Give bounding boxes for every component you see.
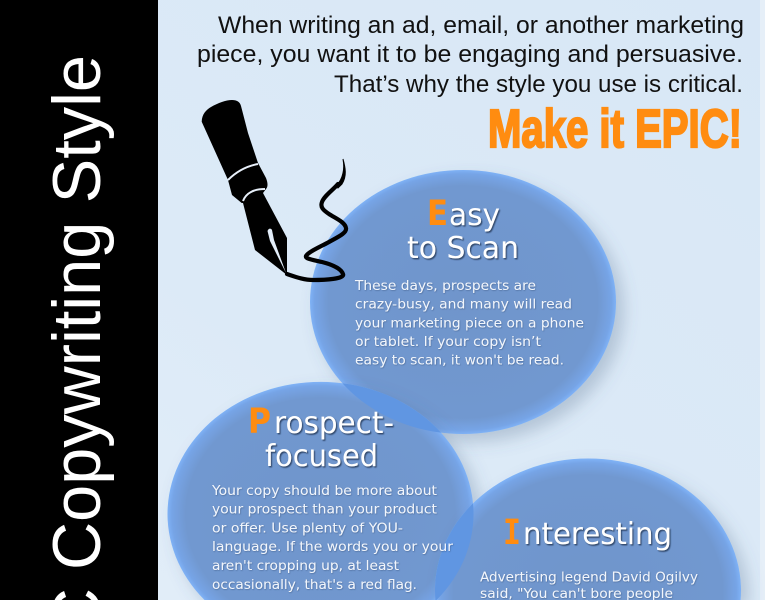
heading: Interesting: I: [503, 513, 521, 553]
text block: Easy to Scan body: [354, 279, 584, 369]
heading: Prospect-focused: [248, 402, 394, 474]
text block: Prospect-focused body: Your copy should be more about: [211, 484, 437, 499]
text block: Prospect-focused body: occasionally, that's a red flag.: [212, 578, 417, 593]
heading: Prospect-focused: P: [248, 402, 271, 442]
text block: Prospect-focused body: [211, 484, 454, 593]
panel: Easy to Scan bubble: [310, 170, 616, 434]
heading: Easy to Scan: E: [427, 194, 448, 234]
panel: Prospect-focused bubble: [168, 382, 474, 600]
intro text: That’s why the style you use is critical.: [334, 71, 743, 98]
text block: Easy to Scan body: easy to scan, it won't be read.: [355, 354, 564, 369]
icon: fountain pen with ink squiggle: [202, 100, 346, 280]
heading: Easy to Scan: to Scan: [407, 231, 519, 266]
intro text: piece, you want it to be engaging and persuasive.: [197, 41, 743, 68]
text block: Easy to Scan body: These days, prospects are: [354, 279, 536, 294]
sidebar heading: Copywriting Style: [39, 55, 115, 570]
text block: Easy to Scan body: or tablet. If your copy isn’t: [355, 335, 541, 350]
heading: Easy to Scan: [407, 194, 519, 266]
overlap lens: Easy and Prospect bubbles: [342, 383, 441, 432]
intro text: When writing an ad, email, or another marketing: [218, 12, 744, 39]
intro text: [197, 12, 744, 98]
text block: Prospect-focused body: language. If the words you or your: [212, 540, 454, 555]
panel: black sidebar with vertical title: [0, 0, 158, 600]
text block: Prospect-focused body: your prospect than your product: [212, 503, 437, 518]
panel: Interesting bubble: [435, 458, 741, 600]
text block: Interesting body: [480, 570, 698, 600]
heading: Easy to Scan: asy: [449, 198, 500, 233]
heading: Prospect-focused: rospect-: [274, 406, 394, 441]
text block: Easy to Scan body: your marketing piece on a phone: [355, 316, 584, 331]
text block: Interesting body: Advertising legend David Ogilvy: [480, 570, 698, 586]
text block: Easy to Scan body: crazy-busy, and many will read: [355, 298, 572, 313]
text block: Prospect-focused body: aren't cropping up, at least: [212, 559, 399, 574]
heading: Prospect-focused: focused: [265, 439, 378, 474]
heading: Interesting: nteresting: [523, 517, 672, 552]
overlap lens: Prospect and Interesting bubbles: [435, 504, 474, 600]
text block: Prospect-focused body: or offer. Use plenty of YOU-: [212, 521, 403, 536]
